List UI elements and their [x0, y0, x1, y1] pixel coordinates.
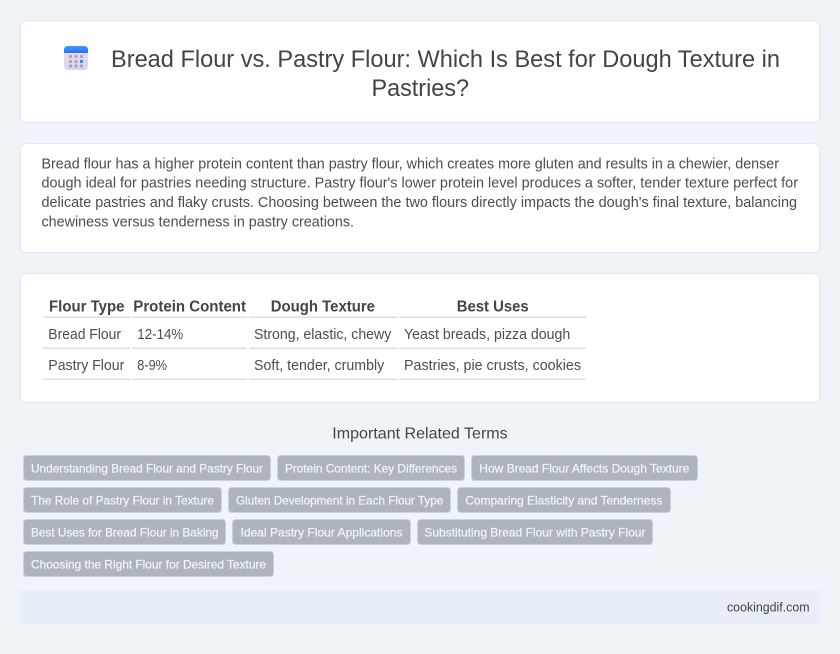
related terms chips — [24, 456, 698, 576]
chip — [472, 456, 698, 480]
table row: bread flour: Yeast breads, pizza dough — [404, 327, 570, 343]
chip: How Bread Flour Affects Dough Texture — [479, 461, 690, 475]
table row: bread flour: Bread Flour — [48, 327, 121, 343]
table row: pastry flour: Pastry Flour — [48, 358, 124, 374]
chip: Protein Content: Key Differences — [285, 461, 457, 475]
table row: bread flour — [48, 327, 570, 343]
chip — [228, 488, 450, 512]
chip: Ideal Pastry Flour Applications — [240, 525, 402, 539]
footer source: cookingdif.com — [727, 600, 810, 614]
footer — [20, 590, 820, 624]
panel: header — [20, 20, 820, 122]
table row: pastry flour — [48, 358, 581, 374]
chip — [278, 456, 464, 480]
chip: The Role of Pastry Flour in Texture — [31, 493, 214, 507]
title — [111, 46, 780, 102]
text block: summary paragraph: chewiness versus tenderness in pastry creations. — [42, 215, 354, 231]
chip — [24, 456, 270, 480]
title: Pastries? — [372, 75, 469, 102]
chip: Substituting Bread Flour with Pastry Flour — [424, 525, 645, 539]
title: Bread Flour vs. Pastry Flour: Which Is Best for Dough Texture in — [111, 46, 780, 73]
chip: Choosing the Right Flour for Desired Texture — [31, 557, 266, 571]
chip: Best Uses for Bread Flour in Baking — [31, 525, 218, 539]
chip — [24, 488, 222, 512]
table row: bread flour: 12-14% — [137, 327, 183, 343]
text block: summary paragraph: delicate pastries and flaky crusts. Choosing between the two flours directly impacts the dough's final texture, balancing — [42, 195, 797, 211]
table row: pastry flour: Pastries, pie crusts, cookies — [404, 358, 581, 374]
table row: pastry flour: Soft, tender, crumbly — [254, 358, 385, 374]
chip — [24, 552, 274, 576]
text block: summary paragraph: dough ideal for pastries needing structure. Pastry flour's lower protein level produces a softer, tender texture perfect for — [42, 176, 798, 192]
chip: Comparing Elasticity and Tenderness — [465, 493, 662, 507]
icon: calendar — [64, 46, 88, 70]
heading: related terms: Important Related Terms — [332, 425, 508, 442]
table row: bread flour: Strong, elastic, chewy — [254, 327, 392, 343]
table row: pastry flour: 8-9% — [137, 358, 167, 374]
table header row: Dough Texture — [271, 299, 375, 316]
chip — [24, 520, 226, 544]
panel: summary text — [20, 144, 820, 252]
chip: Gluten Development in Each Flour Type — [236, 493, 444, 507]
chip — [232, 520, 410, 544]
text block: summary paragraph: Bread flour has a higher protein content than pastry flour, which creates more gluten and results in a chewier, denser — [42, 156, 779, 172]
chip — [418, 520, 652, 544]
table header row — [49, 299, 529, 316]
table header row: Flour Type — [49, 299, 125, 316]
table header row: Protein Content — [133, 299, 247, 316]
text block: summary paragraph — [42, 156, 798, 231]
panel: comparison table — [20, 274, 820, 402]
chip — [458, 488, 670, 512]
chip: Understanding Bread Flour and Pastry Flour — [31, 461, 263, 475]
table header row: Best Uses — [457, 299, 529, 316]
